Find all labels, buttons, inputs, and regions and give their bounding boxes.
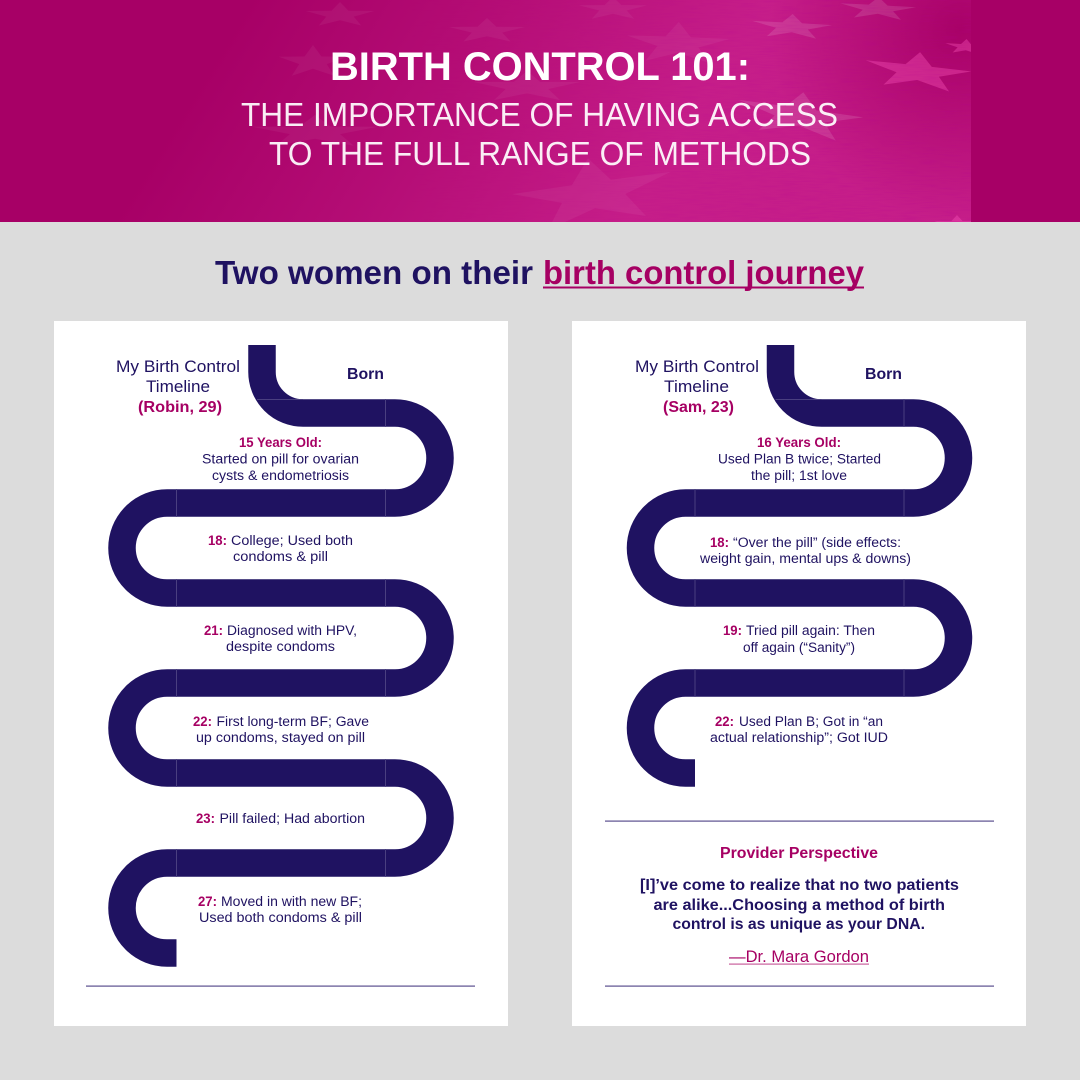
event: age 18 bbox=[699, 535, 911, 566]
event: age 22: actual relationship”; Got IUD bbox=[710, 730, 888, 745]
timeline heading: Sam: (Sam, 23) bbox=[663, 399, 734, 416]
event: age 16: the pill; 1st love bbox=[751, 468, 847, 483]
event: age 15 bbox=[202, 435, 359, 483]
event: age 22 bbox=[193, 714, 369, 745]
event: age 15: Started on pill for ovarian bbox=[202, 452, 359, 466]
event: age 22: 22: bbox=[193, 714, 212, 729]
timeline heading: Sam: Timeline bbox=[664, 378, 729, 396]
event: age 18: “Over the pill” (side effects: bbox=[733, 535, 901, 550]
event: age 27: Used both condoms & pill bbox=[199, 910, 362, 925]
label: Born: Born bbox=[865, 366, 902, 383]
header banner bbox=[0, 0, 1080, 234]
timeline heading: Robin bbox=[116, 358, 240, 416]
event: age 18 bbox=[208, 533, 353, 564]
event: age 23: Pill failed; Had abortion bbox=[220, 811, 365, 826]
event: age 16 bbox=[718, 435, 881, 483]
event: age 18: 18: bbox=[710, 535, 729, 550]
event: age 18: weight gain, mental ups & downs) bbox=[699, 551, 911, 566]
event: age 18: 18: bbox=[208, 533, 227, 548]
winding timeline path: Robin bbox=[122, 345, 440, 953]
event: age 21: 21: bbox=[204, 623, 223, 638]
timeline heading: Robin: My Birth Control bbox=[116, 358, 240, 376]
provider perspective heading: Provider Perspective bbox=[720, 845, 878, 862]
event: age 27 bbox=[198, 894, 362, 925]
event: age 15: cysts & endometriosis bbox=[212, 468, 349, 483]
title: THE IMPORTANCE OF HAVING ACCESS bbox=[241, 96, 838, 133]
panel: Robin timeline bbox=[54, 321, 508, 1026]
section heading: birth control journey bbox=[543, 254, 865, 291]
event: age 27: Moved in with new BF; bbox=[221, 894, 362, 909]
event: age 22: Used Plan B; Got in “an bbox=[739, 714, 883, 729]
event: age 22: up condoms, stayed on pill bbox=[196, 730, 365, 745]
label: Born: Born bbox=[347, 366, 384, 383]
event: age 18: condoms & pill bbox=[233, 549, 328, 564]
event: age 22: First long-term BF; Gave bbox=[216, 714, 369, 729]
title: TO THE FULL RANGE OF METHODS bbox=[269, 135, 811, 172]
title bbox=[241, 45, 838, 172]
provider quote: control is as unique as your DNA. bbox=[672, 916, 925, 933]
title: BIRTH CONTROL 101: bbox=[330, 45, 750, 89]
event: age 23: 23: bbox=[196, 811, 215, 826]
winding timeline path: Sam bbox=[640, 345, 958, 773]
timeline heading: Robin: Timeline bbox=[146, 378, 210, 396]
event: age 21: despite condoms bbox=[226, 639, 335, 654]
timeline heading: Sam: My Birth Control bbox=[635, 358, 759, 376]
event: age 22: 22: bbox=[715, 714, 734, 729]
event: age 21: Diagnosed with HPV, bbox=[227, 623, 357, 638]
event: age 15: 15 Years Old: bbox=[239, 435, 322, 450]
panel: Sam timeline bbox=[572, 321, 1026, 1026]
quote attribution: —Dr. Mara Gordon bbox=[729, 948, 869, 966]
event: age 19 bbox=[723, 623, 875, 655]
timeline heading: Robin: (Robin, 29) bbox=[138, 399, 222, 416]
section heading: Two women on their bbox=[215, 254, 533, 291]
provider quote bbox=[640, 877, 959, 933]
event: age 19: 19: bbox=[723, 623, 742, 638]
event: age 19: Tried pill again: Then bbox=[746, 623, 875, 638]
event: age 16: 16 Years Old: bbox=[757, 435, 841, 450]
event: age 18: College; Used both bbox=[231, 533, 353, 548]
provider quote: are alike...Choosing a method of birth bbox=[654, 897, 945, 914]
event: age 27: 27: bbox=[198, 894, 217, 909]
section heading bbox=[215, 254, 865, 291]
event: age 21 bbox=[204, 623, 357, 654]
event: age 22 bbox=[710, 714, 888, 745]
event: age 19: off again (“Sanity”) bbox=[743, 640, 855, 655]
provider quote: [I]’ve come to realize that no two patients bbox=[640, 877, 959, 894]
event: age 16: Used Plan B twice; Started bbox=[718, 452, 881, 466]
timeline heading: Sam bbox=[635, 358, 759, 416]
